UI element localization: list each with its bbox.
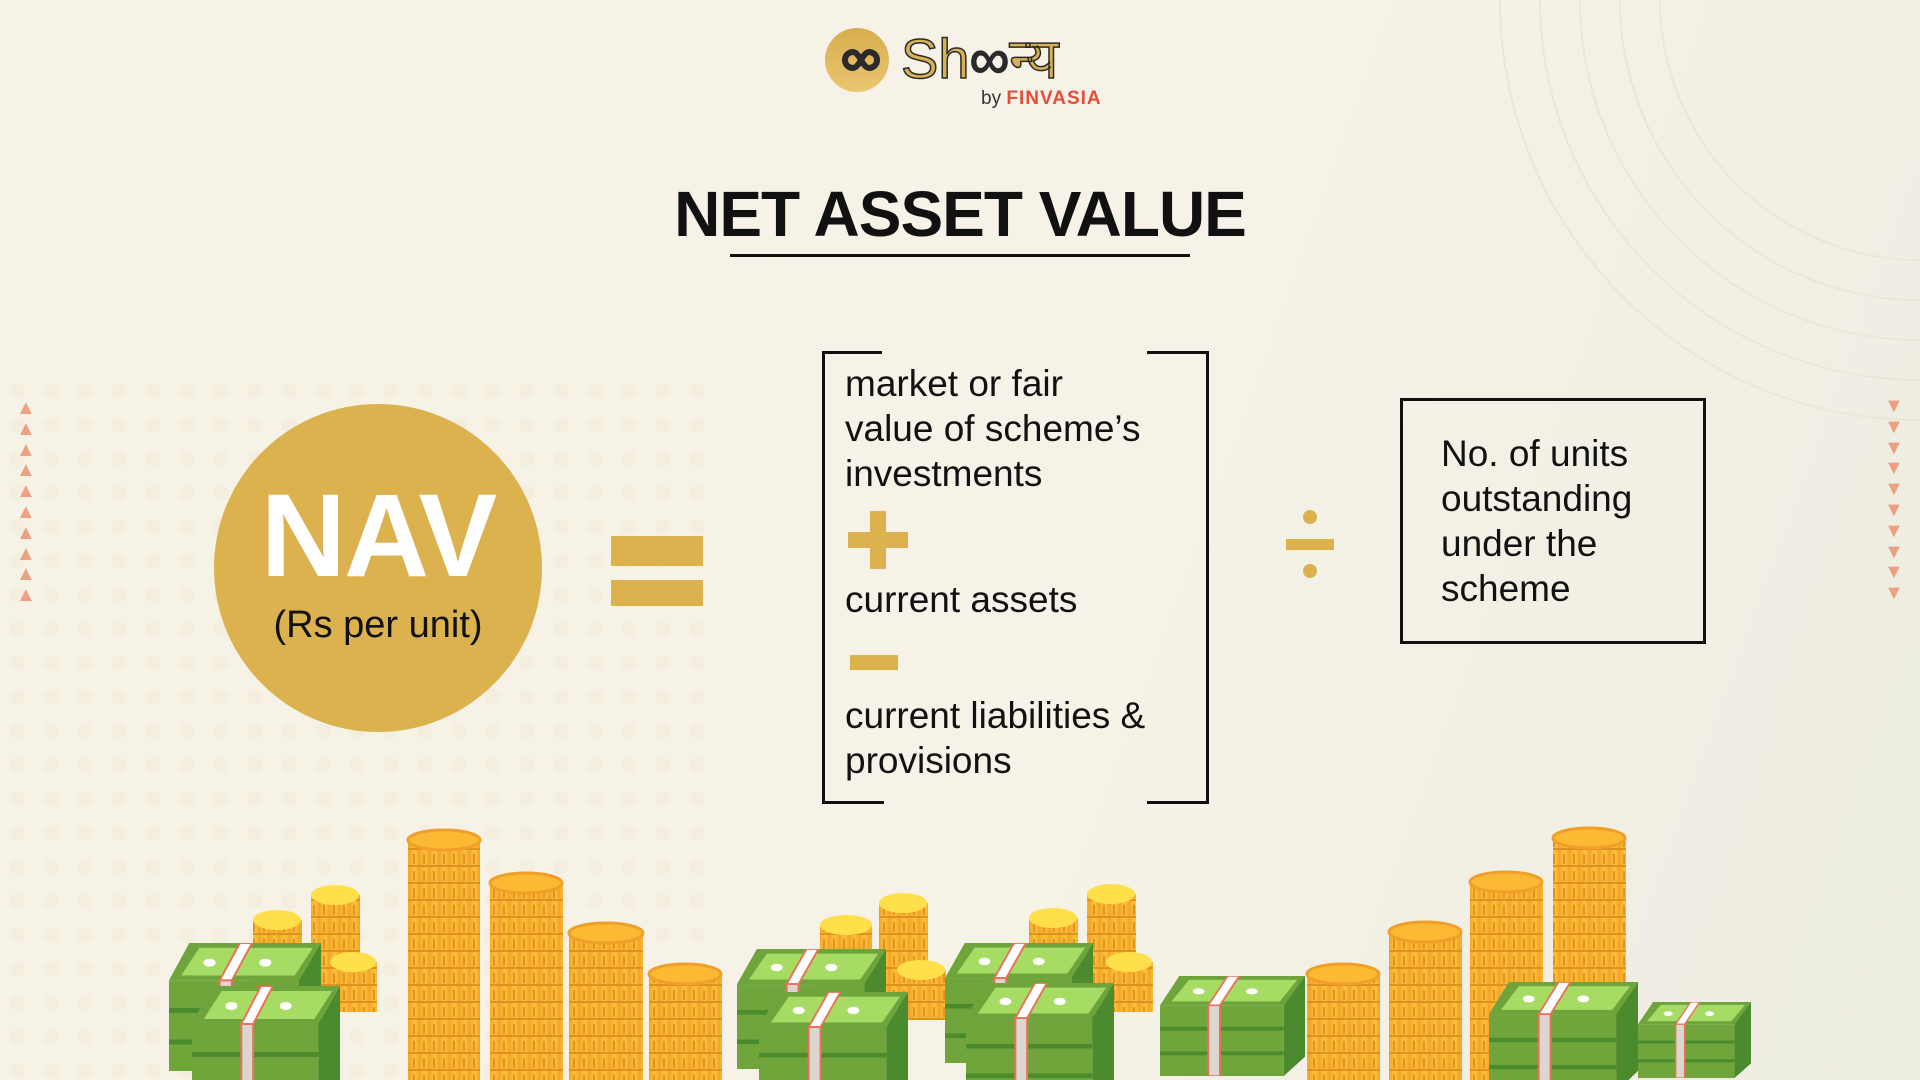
triangles left: ▲ [16, 563, 36, 585]
text: market value: investments [845, 453, 1042, 494]
triangles right: ▼ [1884, 437, 1904, 459]
triangles right: ▼ [1884, 582, 1904, 604]
triangles right [1884, 395, 1904, 604]
logo: by FINVASIA [981, 88, 1102, 109]
triangles left: ▲ [16, 439, 36, 461]
panel: units outstanding: No. of units [1441, 433, 1628, 474]
panel: units outstanding [1400, 398, 1706, 644]
logo [825, 27, 1102, 109]
equals sign [611, 536, 703, 606]
text: liabilities [845, 695, 1145, 781]
illustration: money and coins [169, 826, 1751, 1080]
triangles left: ▲ [16, 397, 36, 419]
icon: divide [1286, 510, 1334, 578]
panel: units outstanding: outstanding [1441, 478, 1632, 519]
triangles left: ▲ [16, 480, 36, 502]
logo text: Sh∞न्य [901, 27, 1058, 90]
panel: units outstanding: under the [1441, 523, 1597, 564]
triangles right: ▼ [1884, 478, 1904, 500]
text: market value [845, 363, 1140, 494]
icon: logo circle [825, 28, 889, 92]
text: liabilities: current liabilities & [845, 695, 1145, 736]
triangles right: ▼ [1884, 416, 1904, 438]
triangles left: ▲ [16, 584, 36, 606]
triangles left: ▲ [16, 543, 36, 565]
text: market value: value of scheme’s [845, 408, 1140, 449]
panel: units outstanding: scheme [1441, 568, 1571, 609]
icon: minus [850, 655, 898, 670]
NAV circle: NAV [261, 470, 495, 602]
triangles left: ▲ [16, 522, 36, 544]
bill stacks [169, 943, 1751, 1080]
triangles right: ▼ [1884, 561, 1904, 583]
NAV circle [214, 404, 542, 732]
coin stacks [253, 828, 1626, 1080]
text: current assets: current assets [845, 579, 1077, 620]
triangles left [16, 397, 36, 606]
text: market value: market or fair [845, 363, 1063, 404]
text: liabilities: provisions [845, 740, 1012, 781]
triangles left: ▲ [16, 418, 36, 440]
triangles right: ▼ [1884, 457, 1904, 479]
icon: plus [848, 511, 908, 569]
triangles left: ▲ [16, 501, 36, 523]
triangles right: ▼ [1884, 395, 1904, 417]
triangles left: ▲ [16, 459, 36, 481]
bracket group: numerator [822, 351, 1209, 804]
NAV circle: (Rs per unit) [273, 604, 483, 646]
triangles right: ▼ [1884, 520, 1904, 542]
triangles right: ▼ [1884, 499, 1904, 521]
title: NET ASSET VALUE [674, 178, 1246, 250]
triangles right: ▼ [1884, 541, 1904, 563]
small shiny coins [253, 920, 302, 1000]
